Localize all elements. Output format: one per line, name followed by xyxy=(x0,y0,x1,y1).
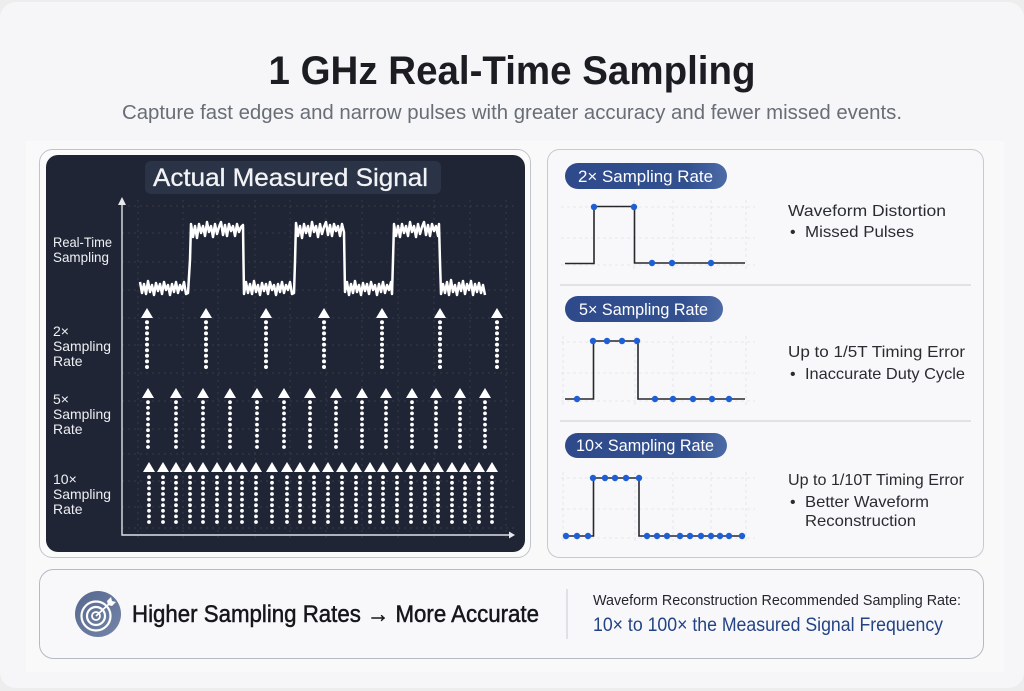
note: 2x: Waveform Distortion xyxy=(788,203,946,220)
label: 2x sampling rate: Sampling xyxy=(53,338,111,354)
step chart: 2x xyxy=(561,200,755,272)
label: 2x sampling rate: 2× xyxy=(53,323,69,339)
note: 10x: Reconstruction xyxy=(805,513,916,530)
note: 2x: Missed Pulses xyxy=(805,224,914,241)
pill: 10x sampling rate: 10× Sampling Rate xyxy=(576,437,714,455)
panel: sampling rate comparison xyxy=(548,150,984,558)
recommendation label: Waveform Reconstruction Recommended Sampling Rate: xyxy=(593,593,961,609)
label: 2x sampling rate: Rate xyxy=(53,353,83,369)
10x row xyxy=(561,433,965,544)
subtitle: Capture fast edges and narrow pulses with greater accuracy and fewer missed events. xyxy=(122,101,902,124)
step chart: 10x xyxy=(561,472,755,544)
note: 10x: Up to 1/10T Timing Error xyxy=(788,472,965,489)
5x row xyxy=(561,296,966,408)
note: 5x: Up to 1/5T Timing Error xyxy=(788,344,966,361)
label: 5x sampling rate: Sampling xyxy=(53,406,111,422)
pill: 2x sampling rate: 2× Sampling Rate xyxy=(578,168,713,186)
arrows: 10x sampling xyxy=(143,462,498,522)
note: 2x: • xyxy=(790,224,796,241)
pill: 2x sampling rate xyxy=(565,163,727,189)
panel heading: Actual Measured Signal xyxy=(153,164,428,192)
title: 1 GHz Real-Time Sampling xyxy=(268,49,756,93)
step chart: 5x xyxy=(561,336,755,408)
arrows: 2x sampling xyxy=(141,308,503,367)
note: 5x: • xyxy=(790,366,796,383)
recommendation value: 10× to 100× the Measured Signal Frequency xyxy=(593,615,943,636)
panel: takeaway banner xyxy=(40,570,984,658)
pill: 10x sampling rate xyxy=(565,433,727,458)
note: 5x: Inaccurate Duty Cycle xyxy=(805,366,965,383)
label: 5x sampling rate: Rate xyxy=(53,421,83,437)
headline: higher sampling rates: Higher Sampling Rates → More Accurate xyxy=(132,601,539,628)
2x row xyxy=(561,163,946,272)
label: 10x sampling rate: Rate xyxy=(53,501,83,517)
pill: 5x sampling rate xyxy=(565,296,723,322)
note: 10x: • xyxy=(790,494,796,511)
arrows: 5x sampling xyxy=(142,388,491,447)
label: real-time sampling: Real-Time xyxy=(53,234,112,250)
label: 10x sampling rate: 10× xyxy=(53,471,77,487)
signal waveform xyxy=(140,222,485,295)
note: 10x: Better Waveform xyxy=(805,494,929,511)
label: 5x sampling rate: 5× xyxy=(53,391,69,407)
chart axes xyxy=(118,197,515,538)
panel: actual measured signal xyxy=(40,150,530,558)
label: real-time sampling: Sampling xyxy=(53,249,109,265)
label: 10x sampling rate: Sampling xyxy=(53,486,111,502)
pill: 5x sampling rate: 5× Sampling Rate xyxy=(579,301,708,319)
icon: target with arrow xyxy=(75,591,121,637)
